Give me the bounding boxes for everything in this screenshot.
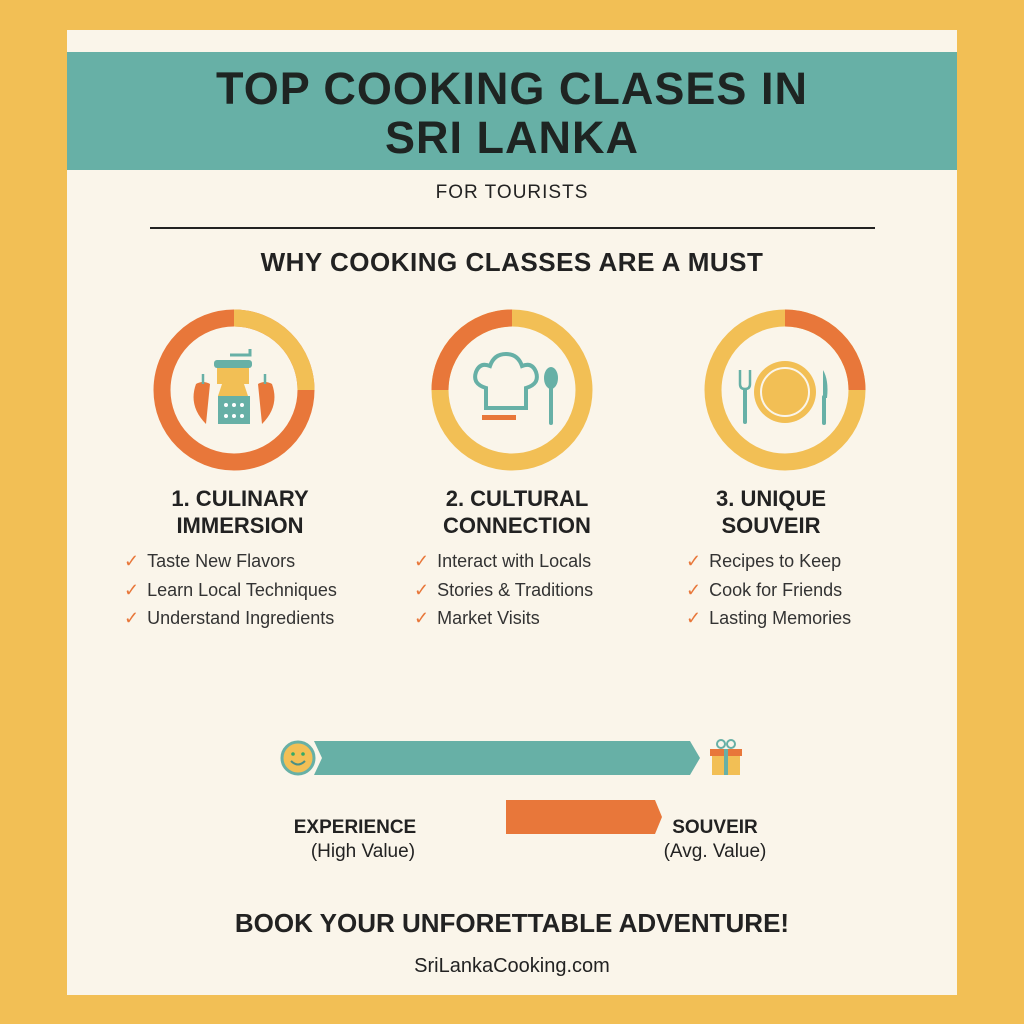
title: SRI LANKA — [385, 112, 639, 163]
call to action: BOOK YOUR UNFORETTABLE ADVENTURE! — [235, 908, 789, 938]
column 1: 1. CULINARY — [171, 486, 309, 511]
title: TOP COOKING CLASES IN — [216, 63, 808, 114]
column 3 — [686, 486, 851, 628]
label: experience — [294, 817, 416, 862]
label: souvenir — [664, 817, 766, 862]
label: souvenir: (Avg. Value) — [664, 841, 766, 862]
subtitle: FOR TOURISTS — [436, 182, 588, 203]
column 3: ✓ Lasting Memories — [686, 608, 851, 628]
column 2: ✓ Stories & Traditions — [414, 580, 593, 600]
column 1: IMMERSION — [176, 513, 304, 538]
header band — [67, 52, 957, 170]
icon: grinder ring — [162, 318, 306, 462]
column 1 — [124, 486, 337, 628]
column 2: CONNECTION — [443, 513, 591, 538]
column 2 — [414, 486, 593, 628]
column 2: ✓ Interact with Locals — [414, 551, 591, 571]
column 2: ✓ Market Visits — [414, 608, 540, 628]
column 1: ✓ Taste New Flavors — [124, 551, 295, 571]
column 3: SOUVEIR — [721, 513, 821, 538]
label: souvenir: SOUVEIR — [672, 817, 758, 838]
column 1: ✓ Understand Ingredients — [124, 608, 334, 628]
url: SriLankaCooking.com — [414, 955, 610, 977]
section heading: WHY COOKING CLASSES ARE A MUST — [261, 247, 763, 277]
column 3: 3. UNIQUE — [716, 486, 826, 511]
column 1: ✓ Learn Local Techniques — [124, 580, 337, 600]
column 3: ✓ Recipes to Keep — [686, 551, 841, 571]
chart: value arrows — [282, 740, 742, 834]
column 2: 2. CULTURAL — [446, 486, 588, 511]
label: experience: (High Value) — [311, 841, 415, 862]
icon: chef hat ring — [440, 318, 584, 462]
title — [216, 63, 808, 163]
icon: plate ring — [713, 318, 857, 462]
label: experience: EXPERIENCE — [294, 817, 416, 838]
column 3: ✓ Cook for Friends — [686, 580, 842, 600]
